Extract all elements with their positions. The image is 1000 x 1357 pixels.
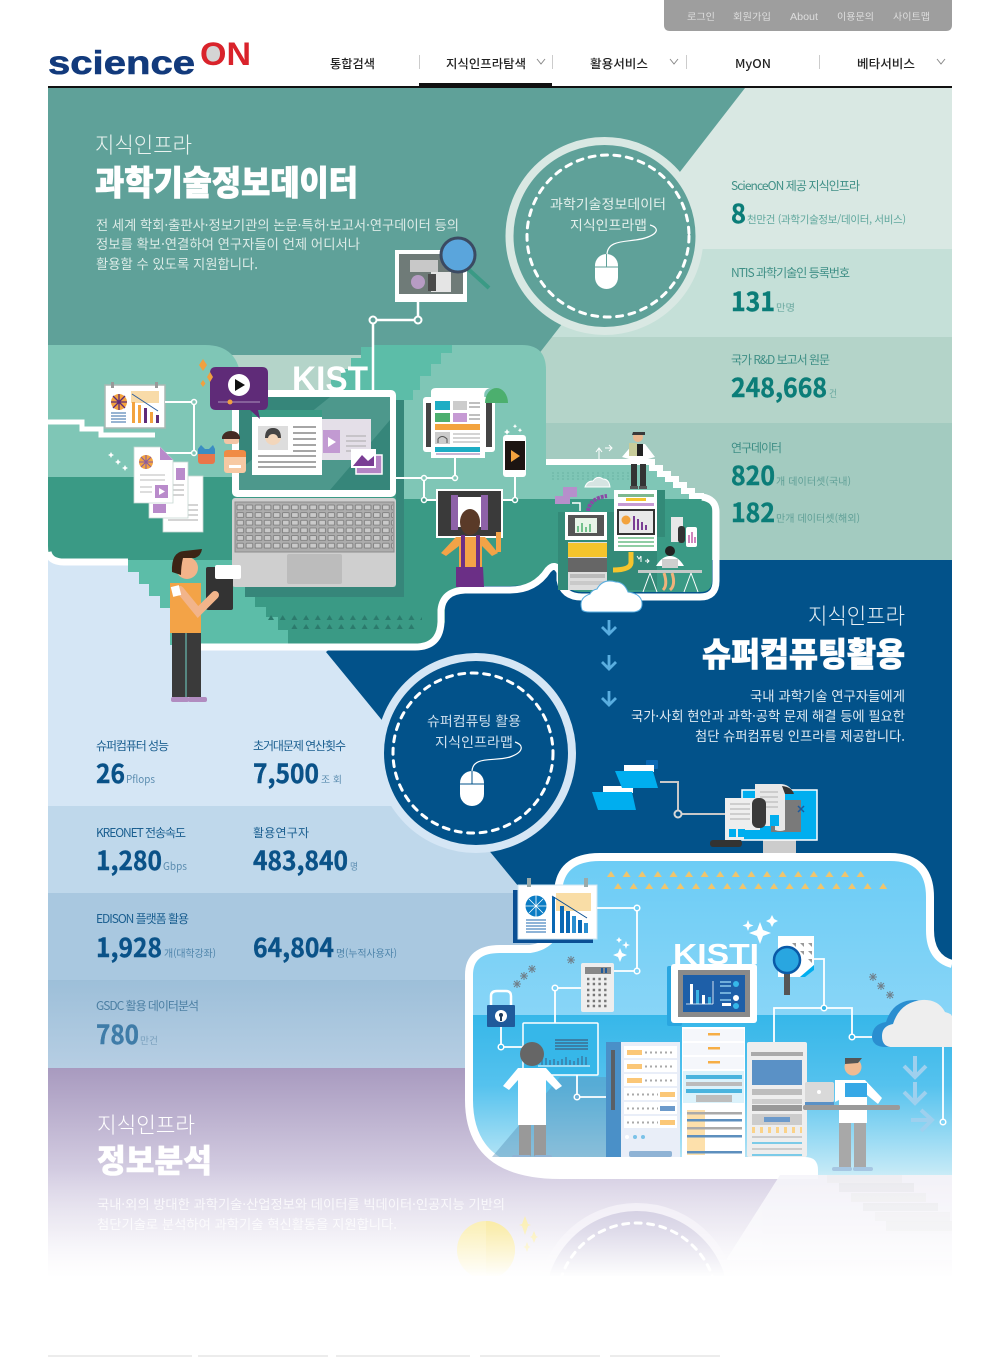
heading: information analysis: 첨단기술로 분석하여 과학기술 혁신활동을 지원합니다. [97, 1214, 397, 1233]
icon: central monitor [667, 964, 757, 1026]
woman at desk [656, 556, 684, 566]
icon: document with magnifier [774, 936, 814, 995]
tall rack [614, 490, 657, 551]
man on stair [622, 444, 655, 464]
stats: supercomputing: 1,280 [96, 841, 162, 878]
heading: supercomputing: 국내 과학기술 연구자들에게 [750, 685, 905, 705]
purple gear arc [588, 496, 607, 511]
article window [252, 410, 322, 417]
stats: supercomputing: KREONET 전송속도 [96, 824, 186, 841]
darker backdrop behind racks [558, 490, 665, 590]
illustration: woman at film screen [436, 489, 503, 587]
green panel: stair band [128, 560, 288, 645]
stats: supercomputing: Pflops [126, 772, 155, 787]
circle: science data map [510, 141, 700, 331]
stats: supercomputing: 만건 [140, 1033, 158, 1047]
stats: supercomputing: EDISON 플랫폼 활용 [96, 910, 189, 927]
connector: document to racks and cloud [774, 959, 946, 1125]
icon: laptop [232, 390, 404, 597]
blue zone: diagonal shade [492, 1077, 606, 1157]
stats: supercomputing [96, 737, 397, 1052]
top utility bar: About [790, 11, 818, 23]
icon: data screen [523, 1023, 598, 1075]
icon: pinned chart board [105, 382, 165, 428]
main navigation: 통합검색 [330, 55, 375, 72]
icon: folders [592, 760, 658, 810]
top utility bar [664, 0, 952, 31]
top utility bar: 회원가입 [733, 11, 771, 23]
background bands: right teal column [48, 88, 952, 560]
laptop base [232, 498, 396, 587]
heading: supercomputing: 슈퍼컴퓨팅활용 [702, 628, 905, 676]
icon: lock [487, 991, 515, 1027]
stats: science data: 연구데이터 [731, 439, 782, 456]
stats: supercomputing: 슈퍼컴퓨터 성능 [96, 737, 169, 754]
heading: supercomputing: 첨단 슈퍼컴퓨팅 인프라를 제공합니다. [695, 725, 905, 745]
illustration: man holding tablet [170, 549, 241, 702]
connector: board and docs [161, 400, 196, 456]
KISTI label: KISTI [673, 939, 759, 971]
heading: supercomputing [631, 599, 905, 745]
rack center [682, 1027, 745, 1157]
logo: science [48, 44, 195, 81]
stats: supercomputing: 7,500 [253, 754, 319, 791]
asterisks in panel [513, 956, 894, 999]
heading: information analysis: 국내·외의 방대한 과학기술·산업정보와 데이터를 빅데이터·인공지능 기반의 [97, 1194, 505, 1213]
heading: knowledge infrastructure data: 전 세계 학회·출판사·정보기관의 논문·특허·보고서·연구데이터 등의 [96, 214, 459, 234]
stats: supercomputing: 명 [350, 859, 358, 873]
small cloud [585, 477, 610, 487]
stats: supercomputing: 483,840 [253, 841, 348, 878]
stats: science data: ScienceON 제공 지식인프라 [731, 177, 860, 194]
stats: supercomputing: 명(누적사용자) [336, 945, 397, 960]
laptop shadow [245, 400, 404, 597]
stats: science data: 248,668 [731, 368, 827, 405]
stats: science data: 만명 [776, 300, 795, 314]
triangle pattern on laptop floor [268, 612, 422, 630]
main navigation: 지식인프라탐색 [446, 55, 526, 72]
stairs bottom right [726, 1175, 952, 1260]
green panel: upper light areas [48, 345, 700, 505]
icon: big cloud [581, 581, 642, 612]
logo: ON [200, 36, 251, 72]
top utility bar: 로그인 [687, 12, 715, 23]
stats: supercomputing: 개(대학강좌) [164, 945, 216, 960]
connector: board to calculator [597, 905, 640, 974]
circle: supercomputing map [380, 657, 572, 849]
stats: supercomputing: 초거대문제 연산횟수 [253, 737, 346, 754]
stats: science data [731, 177, 906, 530]
icon: monitor with magnifier [395, 238, 489, 302]
stats: science data: 만개 데이터셋(해외) [776, 510, 860, 525]
green panel: white outline [48, 462, 716, 647]
heading: knowledge infrastructure data: 정보를 확보·연결하여 연구자들이 언제 어디서나 [96, 233, 360, 253]
stats: supercomputing: 780 [96, 1015, 139, 1052]
sparkles near documents [108, 452, 128, 471]
decorative white strip left [48, 422, 155, 435]
circle: science data map: 과학기술정보데이터 [550, 193, 666, 213]
icon: newspaper tablet [423, 388, 508, 458]
logo [48, 36, 251, 81]
stats: science data: 천만건 (과학기술정보/데이터, 서비스) [747, 212, 906, 227]
panel: KISTI blue zone [469, 857, 952, 1175]
background: teal top panel [48, 88, 745, 355]
back window [322, 419, 371, 460]
connector: folders to monitor [660, 782, 725, 818]
stats: science data: 국가 R&D 보고서 원문 [731, 351, 830, 368]
circle: information analysis map [541, 1207, 733, 1357]
icon: avatar faces [198, 431, 246, 473]
sparkles in panel [613, 915, 778, 962]
illustration: scientist at screen [503, 1042, 562, 1159]
top utility bar: 사이트맵 [893, 11, 930, 23]
stats: supercomputing: 활용연구자 [253, 824, 309, 841]
circle: supercomputing map: 슈퍼컴퓨팅 활용 [427, 710, 521, 730]
stats: science data: 8 [731, 194, 746, 231]
connector: calculator screen lock [498, 985, 606, 1100]
background: lower left blue bands and purple section [48, 560, 952, 1278]
stats: supercomputing: 64,804 [253, 928, 334, 965]
stats: science data: 건 [829, 386, 837, 400]
photo frames [356, 455, 382, 474]
bottom fade to white [40, 1170, 960, 1278]
purple folders [555, 487, 577, 504]
circle: supercomputing map: 지식인프라맵 [435, 731, 513, 751]
heading: knowledge infrastructure data: 과학기술정보데이터 [95, 156, 358, 205]
main navigation [48, 55, 952, 88]
stats: supercomputing: 조 회 [321, 772, 342, 786]
heading: supercomputing: 국가·사회 현안과 과학·공학 문제 해결 등에 필요한 [631, 705, 905, 725]
stats: science data: 131 [731, 282, 775, 319]
heading: information analysis: 지식인프라 [97, 1108, 195, 1140]
rack left [606, 1042, 680, 1157]
base platform white [495, 1157, 818, 1175]
heading: information analysis: 정보분석 [97, 1136, 212, 1182]
icon: smartphone [503, 424, 526, 477]
blue zone: triangle rows [607, 868, 887, 892]
stats: supercomputing: Gbps [163, 859, 187, 874]
main navigation: MyON [735, 55, 771, 72]
icon: monitor with documents [710, 784, 817, 853]
stats: science data: NTIS 과학기술인 등록번호 [731, 264, 850, 281]
icon: light bulb [457, 1216, 538, 1279]
yellow terminal [568, 542, 607, 590]
heading: supercomputing: 지식인프라 [808, 599, 905, 631]
heading: knowledge infrastructure data: 활용할 수 있도록 지원합니다. [96, 253, 258, 273]
arrows: down to supercomputing [602, 620, 616, 705]
heading: knowledge infrastructure data [95, 128, 459, 273]
main navigation: 베타서비스 [857, 55, 915, 72]
icon: video bubble [199, 359, 268, 419]
icon: panel cloud [872, 1000, 952, 1047]
icon: calculator [581, 963, 614, 1012]
heading: knowledge infrastructure data: 지식인프라 [95, 128, 192, 160]
circle: science data map: 지식인프라맵 [570, 214, 647, 234]
monitor [565, 512, 607, 540]
footer faint line [48, 1355, 720, 1357]
rack right [747, 1042, 807, 1157]
green panel: dark lower area [48, 477, 712, 645]
yellow gear [613, 552, 631, 570]
background: navy section [326, 560, 952, 1010]
document scroll [671, 517, 683, 542]
icon: blue chart board [513, 878, 597, 943]
main navigation: 활용서비스 [590, 55, 648, 72]
stats: science data: 개 데이터셋(국내) [776, 473, 851, 488]
stats: science data: 820 [731, 456, 775, 493]
stats: supercomputing: 1,928 [96, 928, 162, 965]
illustration: right green zone workers and racks [552, 432, 702, 592]
icon: stacked documents [134, 447, 203, 532]
arrows in panel [904, 1056, 932, 1131]
stats: supercomputing: GSDC 활용 데이터분석 [96, 997, 199, 1014]
KIST label: KIST [292, 360, 368, 399]
connector: monitor to laptop [370, 298, 422, 390]
stats: science data: 182 [731, 493, 775, 530]
top utility bar: 이용문의 [837, 12, 874, 23]
stats: supercomputing: 26 [96, 754, 125, 791]
connector: laptop to tablet and screen [396, 458, 518, 502]
illustration: right scientist at table [803, 1058, 900, 1171]
heading: information analysis [97, 1108, 505, 1233]
